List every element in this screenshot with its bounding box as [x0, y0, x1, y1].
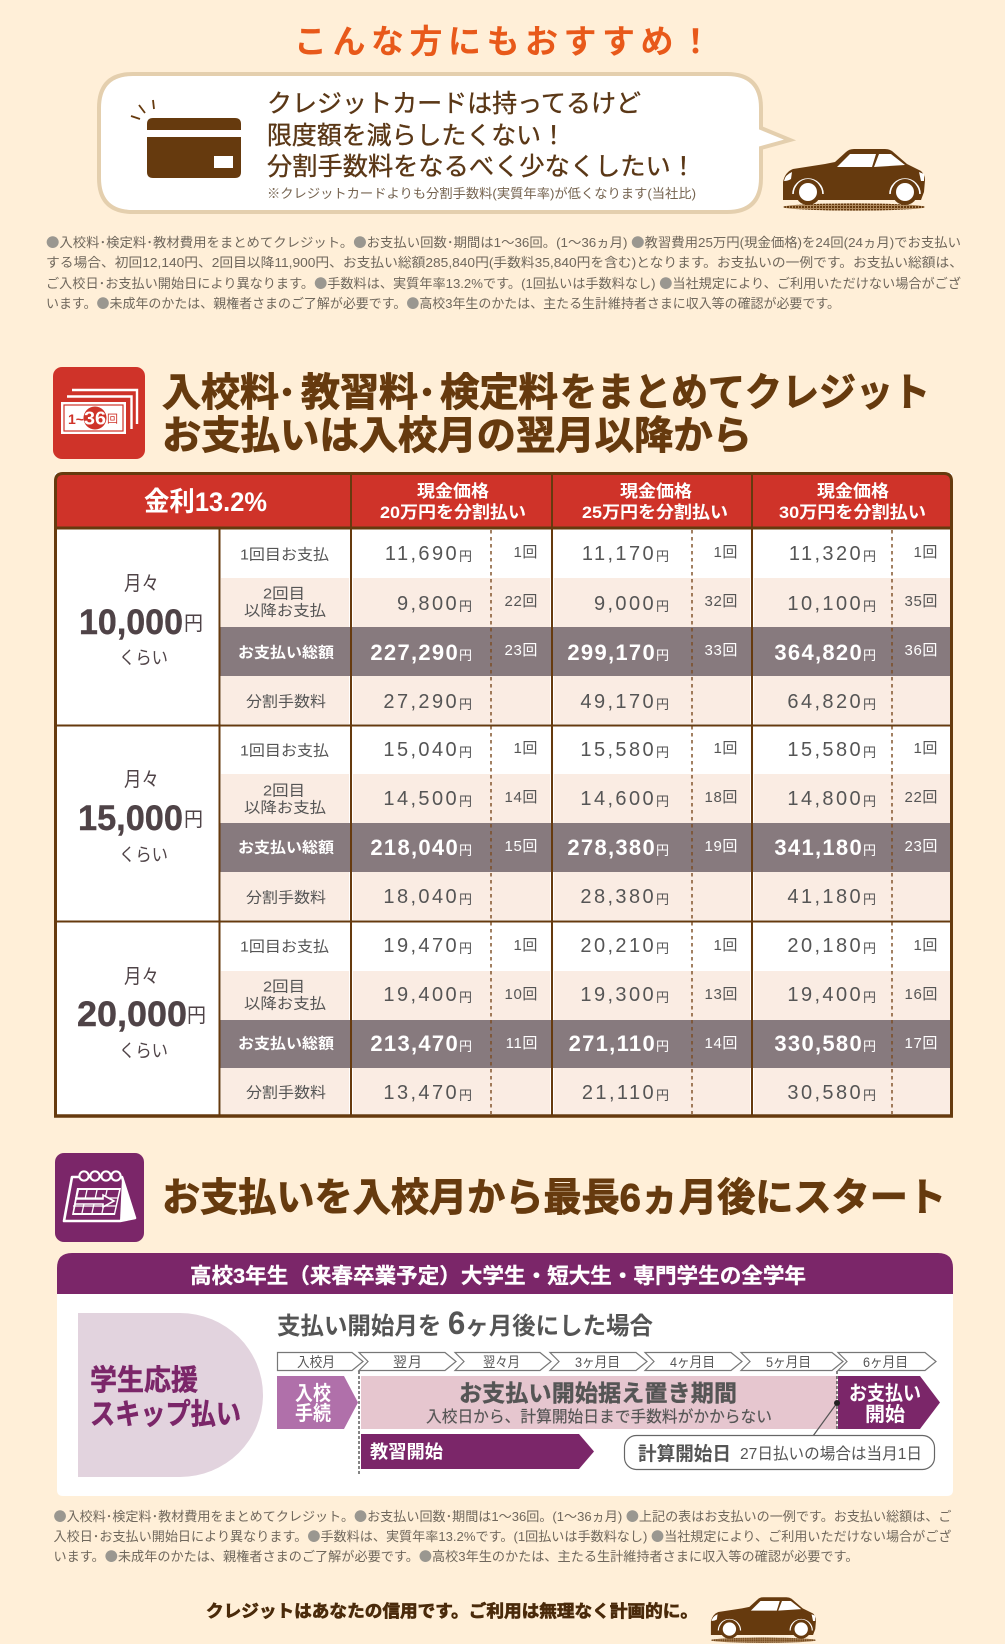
block: monthly 20,000 yen: 円 — [459, 941, 472, 956]
note text: top: する場合、初回12,140円、2回目以降11,900円、お支払い総額285,840円(手数料35,840円を含む)となります。お支払いの一例です。お支払い総額は、 — [46, 255, 963, 270]
timeline heading: 支払い開始月を 6ヶ月後にした場合 — [277, 1305, 653, 1341]
month chevrons: 5ヶ月目 — [766, 1354, 811, 1370]
bubble text: ※クレジットカードよりも分割手数料(実質年率)が低くなります(当社比) — [267, 186, 696, 201]
block: monthly 15,000 yen: 15,040 — [383, 739, 459, 761]
month chevrons: 入校月 — [297, 1354, 335, 1370]
block: monthly 10,000 yen: 33回 — [704, 642, 738, 659]
block: monthly 15,000 yen: 1回 — [913, 740, 938, 757]
block: monthly 20,000 yen: 円 — [863, 941, 876, 956]
block: monthly 20,000 yen: 月々 — [124, 966, 159, 988]
block: monthly 15,000 yen: 円 — [459, 892, 472, 907]
block: monthly 10,000 yen: 以降お支払 — [244, 602, 326, 620]
heading: section 1: 入校料 — [162, 372, 279, 415]
block: monthly 15,000 yen: 18,040 — [383, 886, 459, 908]
block: monthly 20,000 yen: 分割手数料 — [246, 1084, 326, 1102]
block: monthly 20,000 yen: 20,210 — [580, 935, 656, 957]
arrow: payment start — [838, 1376, 940, 1429]
icon: bills 1-36: 36 — [84, 408, 106, 428]
bubble text: 限度額を減らしたくない！ — [267, 122, 566, 150]
block: monthly 20,000 yen: 20,000 — [77, 995, 187, 1034]
callout: calculation start date: 27日払いの場合は当月1日 — [740, 1445, 922, 1463]
block: monthly 10,000 yen: 32回 — [704, 593, 738, 610]
plan name badge: 学生応援 — [90, 1364, 198, 1397]
block: monthly 20,000 yen: 円 — [656, 1039, 669, 1054]
block: monthly 20,000 yen: 円 — [459, 1039, 472, 1054]
speech bubble panel — [99, 74, 790, 212]
note text: top: います。●未成年のかたは、親権者さまのご了解が必要です。●高校3年生のかたは、主たる生計維持者さまに収入等の確認が必要です。 — [46, 293, 840, 312]
block: monthly 10,000 yen — [79, 543, 938, 713]
table header row — [56, 474, 952, 529]
heading: section 1: 教習料 — [301, 372, 418, 415]
block: monthly 15,000 yen — [78, 739, 938, 908]
block: monthly 15,000 yen: 円 — [459, 843, 472, 858]
block: monthly 10,000 yen: 49,170 — [580, 691, 656, 713]
block: monthly 15,000 yen: 2回目 — [263, 782, 305, 800]
block: monthly 15,000 yen: 円 — [863, 843, 876, 858]
table header row: 20万円を分割払い — [380, 503, 526, 522]
block: monthly 15,000 yen: 23回 — [904, 838, 938, 855]
block: monthly 15,000 yen: 15,580 — [787, 739, 863, 761]
block: monthly 10,000 yen: 円 — [656, 697, 669, 712]
block: monthly 15,000 yen: 円 — [863, 892, 876, 907]
bubble text: 分割手数料をなるべく少なくしたい！ — [267, 153, 696, 181]
block: monthly 20,000 yen: 13,470 — [383, 1082, 459, 1104]
footer message: クレジットはあなたの信用です。ご利用は無理なく計画的に。 — [206, 1601, 698, 1621]
table header row: 現金価格 — [417, 481, 489, 501]
month chevrons: 4ヶ月目 — [670, 1354, 715, 1370]
heading: section 1 — [162, 372, 930, 458]
block: monthly 15,000 yen: 22回 — [904, 789, 938, 806]
block: monthly 10,000 yen: 円 — [863, 599, 876, 614]
plan name badge — [78, 1313, 263, 1477]
block: monthly 20,000 yen: 330,580 — [774, 1031, 863, 1056]
block: monthly 10,000 yen: 1回 — [913, 544, 938, 561]
block: monthly 10,000 yen: 2回目 — [263, 586, 305, 602]
bubble shape — [99, 74, 790, 212]
note text: top — [46, 232, 963, 312]
block: monthly 20,000 yen: 円 — [187, 1005, 206, 1027]
callout: calculation start date — [624, 1400, 934, 1470]
block: monthly 15,000 yen: 14,600 — [580, 788, 656, 810]
block: monthly 20,000 yen: 1回 — [513, 937, 538, 954]
block: monthly 20,000 yen: 円 — [863, 1039, 876, 1054]
month chevrons: 翌々月 — [483, 1354, 520, 1370]
block: monthly 10,000 yen: くらい — [119, 648, 168, 668]
block: monthly 10,000 yen: 円 — [863, 697, 876, 712]
block: monthly 15,000 yen: 41,180 — [787, 886, 863, 908]
callout: calculation start date: 計算開始日 — [638, 1442, 731, 1465]
block: monthly 10,000 yen: 11,320 — [789, 543, 863, 565]
month chevrons — [278, 1352, 936, 1370]
block: monthly 20,000 yen — [77, 935, 938, 1104]
block: monthly 10,000 yen: 364,820 — [774, 640, 863, 665]
block: monthly 20,000 yen: 19,400 — [383, 984, 459, 1006]
block: monthly 10,000 yen: 分割手数料 — [246, 694, 326, 710]
block: monthly 20,000 yen: 2回目 — [263, 978, 305, 996]
block: monthly 10,000 yen: 23回 — [504, 642, 538, 659]
table header row: 現金価格 — [817, 481, 889, 501]
block: monthly 20,000 yen: 10回 — [504, 986, 538, 1003]
block: monthly 20,000 yen: 21,110 — [582, 1082, 656, 1104]
block: monthly 20,000 yen: 20,180 — [787, 935, 863, 957]
block: monthly 10,000 yen: 35回 — [904, 593, 938, 610]
arrow: payment start: 開始 — [865, 1403, 905, 1426]
grace period bar: お支払い開始据え置き期間 — [459, 1380, 737, 1406]
block: monthly 15,000 yen: 341,180 — [774, 835, 863, 860]
block: monthly 10,000 yen: 27,290 — [383, 691, 459, 713]
block: monthly 15,000 yen: 円 — [656, 843, 669, 858]
icon: credit card — [131, 100, 241, 178]
table header row: 現金価格 — [620, 481, 692, 501]
block: monthly 15,000 yen: 円 — [656, 745, 669, 760]
block: monthly 20,000 yen: 271,110 — [569, 1031, 656, 1056]
block: monthly 15,000 yen: 以降お支払 — [244, 800, 326, 816]
block: monthly 10,000 yen: 227,290 — [370, 640, 459, 665]
month chevrons: 3ヶ月目 — [575, 1354, 620, 1370]
block: monthly 20,000 yen: 11回 — [506, 1035, 538, 1052]
icon: calendar — [55, 1153, 144, 1242]
table header row: 25万円を分割払い — [582, 503, 728, 522]
block: monthly 20,000 yen: 円 — [863, 990, 876, 1005]
icon: bills 1-36: 回 — [107, 412, 118, 426]
block: monthly 15,000 yen: 円 — [863, 745, 876, 760]
block: monthly 15,000 yen: 円 — [656, 794, 669, 809]
icon: bills 1-36: 1~ — [68, 411, 84, 427]
block: monthly 10,000 yen: 1回目お支払 — [240, 546, 329, 564]
note text: top: ●入校料･検定料･教材費用をまとめてクレジット。 ●お支払い回数･期間は1〜36回。(1〜36ヵ月) ●教習費用25万円(現金価格)を24回(24ヵ月)でお支払い — [46, 232, 961, 251]
block: monthly 10,000 yen: 9,800 — [397, 593, 459, 615]
block: monthly 10,000 yen: 円 — [863, 648, 876, 663]
block: monthly 20,000 yen: 16回 — [904, 986, 938, 1003]
block: monthly 20,000 yen: くらい — [119, 1041, 168, 1061]
block: monthly 15,000 yen: 円 — [459, 794, 472, 809]
block: monthly 10,000 yen: 299,170 — [567, 640, 656, 665]
block: monthly 15,000 yen: 19回 — [704, 838, 738, 855]
block: monthly 15,000 yen: 15回 — [504, 838, 538, 855]
block: monthly 20,000 yen: 30,580 — [787, 1082, 863, 1104]
block: monthly 15,000 yen: 円 — [656, 892, 669, 907]
icon: bills 1-36 — [53, 367, 145, 459]
block: monthly 10,000 yen: 22回 — [504, 593, 538, 610]
block: monthly 10,000 yen: 円 — [184, 613, 203, 635]
block: monthly 15,000 yen: 円 — [459, 745, 472, 760]
title: こんな方にもおすすめ！ — [294, 23, 712, 60]
heading: section 1: 検定料 — [440, 372, 558, 415]
table header row: 金利13.2% — [144, 487, 267, 517]
block: monthly 10,000 yen: 円 — [656, 549, 669, 564]
block: monthly 20,000 yen: お支払い総額 — [238, 1034, 334, 1052]
arrow: classes start — [361, 1434, 594, 1469]
arrow: enrollment procedure — [277, 1376, 358, 1429]
block: monthly 10,000 yen: 円 — [656, 599, 669, 614]
note text: top: ご入校日･お支払い開始日により異なります。●手数料は、実質年率13.2%です。(1回払いは手数料なし) ●当社規定により、ご利用いただけない場合がござ — [46, 273, 961, 292]
payment table — [54, 473, 953, 1116]
block: monthly 20,000 yen: 1回 — [713, 937, 738, 954]
table header row: 30万円を分割払い — [779, 503, 926, 522]
block: monthly 20,000 yen: 19,300 — [580, 984, 656, 1006]
block: monthly 10,000 yen: 円 — [656, 648, 669, 663]
block: monthly 10,000 yen: 64,820 — [787, 691, 863, 713]
bubble text — [267, 90, 696, 201]
block: monthly 15,000 yen: 円 — [184, 809, 203, 831]
block: monthly 20,000 yen: 17回 — [904, 1035, 938, 1052]
block: monthly 10,000 yen: 円 — [459, 599, 472, 614]
block: monthly 15,000 yen: 15,000 — [78, 799, 183, 838]
month chevrons: 翌月 — [393, 1354, 422, 1370]
block: monthly 10,000 yen: 円 — [459, 648, 472, 663]
block: monthly 20,000 yen: 1回 — [913, 937, 938, 954]
block: monthly 20,000 yen: 213,470 — [370, 1031, 459, 1056]
block: monthly 15,000 yen: くらい — [119, 845, 168, 865]
block: monthly 15,000 yen: お支払い総額 — [238, 838, 334, 856]
panel: skip payment — [57, 1253, 953, 1496]
block: monthly 10,000 yen: 円 — [459, 549, 472, 564]
icon: car — [783, 149, 925, 211]
plan name badge: スキップ払い — [90, 1398, 241, 1431]
arrow: payment start: お支払い — [849, 1382, 921, 1405]
block: monthly 20,000 yen: 円 — [656, 941, 669, 956]
note text: bottom — [54, 1506, 952, 1565]
block: monthly 15,000 yen: 28,380 — [580, 886, 656, 908]
block: monthly 10,000 yen: お支払い総額 — [238, 644, 334, 662]
block: monthly 10,000 yen: 11,170 — [582, 543, 656, 565]
block: monthly 20,000 yen: 19,470 — [383, 935, 459, 957]
note text: bottom: います。●未成年のかたは、親権者さまのご了解が必要です。●高校3年生のかたは、主たる生計維持者さまに収入等の確認が必要です。 — [54, 1546, 858, 1565]
block: monthly 10,000 yen: 9,000 — [594, 593, 656, 615]
block: monthly 20,000 yen: 円 — [656, 1088, 669, 1103]
block: monthly 15,000 yen: 月々 — [124, 769, 159, 791]
note text: bottom: ●入校料･検定料･教材費用をまとめてクレジット。●お支払い回数･期間は1〜36回。(1〜36ヵ月) ●上記の表はお支払いの一例です。お支払い総額は、ご — [54, 1506, 952, 1525]
block: monthly 15,000 yen: 14,800 — [787, 788, 863, 810]
block: monthly 15,000 yen: 1回 — [713, 740, 738, 757]
block: monthly 15,000 yen: 1回 — [513, 740, 538, 757]
block: monthly 10,000 yen: 円 — [459, 697, 472, 712]
block: monthly 20,000 yen: 14回 — [704, 1035, 738, 1052]
block: monthly 20,000 yen: 円 — [656, 990, 669, 1005]
block: monthly 15,000 yen: 14回 — [504, 789, 538, 806]
block: monthly 10,000 yen: 10,100 — [787, 593, 863, 615]
block: monthly 15,000 yen: 18回 — [704, 789, 738, 806]
panel header — [57, 1253, 953, 1294]
block: monthly 10,000 yen: 36回 — [904, 642, 938, 659]
panel header: 高校3年生（来春卒業予定）大学生・短大生・専門学生の全学年 — [190, 1265, 806, 1288]
block: monthly 20,000 yen: 13回 — [704, 986, 738, 1003]
arrow: enrollment procedure: 手続 — [295, 1402, 331, 1425]
grace period bar: 入校日から、計算開始日まで手数料がかからない — [426, 1407, 772, 1426]
block: monthly 10,000 yen: 1回 — [513, 544, 538, 561]
block: monthly 20,000 yen: 1回目お支払 — [240, 938, 329, 956]
grace period bar — [361, 1376, 837, 1429]
icon: car small — [711, 1597, 816, 1643]
block: monthly 20,000 yen: 以降お支払 — [244, 996, 326, 1012]
heading: section 1: をまとめてクレジット — [560, 372, 930, 415]
block: monthly 15,000 yen: 1回目お支払 — [240, 742, 329, 760]
block: monthly 20,000 yen: 円 — [863, 1088, 876, 1103]
block: monthly 10,000 yen: 11,690 — [385, 543, 459, 565]
block: monthly 15,000 yen: 円 — [863, 794, 876, 809]
block: monthly 20,000 yen: 円 — [459, 990, 472, 1005]
block: monthly 20,000 yen: 19,400 — [787, 984, 863, 1006]
bubble text: クレジットカードは持ってるけど — [267, 90, 641, 118]
block: monthly 15,000 yen: 分割手数料 — [246, 890, 326, 906]
block: monthly 20,000 yen: 円 — [459, 1088, 472, 1103]
block: monthly 10,000 yen: 月々 — [124, 573, 159, 595]
month chevrons: 6ヶ月目 — [863, 1354, 908, 1370]
arrow: enrollment procedure: 入校 — [295, 1382, 331, 1405]
block: monthly 10,000 yen: 1回 — [713, 544, 738, 561]
block: monthly 15,000 yen: 218,040 — [370, 835, 459, 860]
block: monthly 15,000 yen: 278,380 — [567, 835, 656, 860]
heading: section 2: お支払いを入校月から最長6ヵ月後にスタート — [162, 1177, 946, 1220]
block: monthly 10,000 yen: 円 — [863, 549, 876, 564]
heading: section 1: お支払いは入校月の翌月以降から — [162, 415, 752, 458]
block: monthly 15,000 yen: 14,500 — [383, 788, 459, 810]
block: monthly 10,000 yen: 10,000 — [79, 603, 183, 642]
arrow: classes start: 教習開始 — [370, 1442, 443, 1462]
panel body — [57, 1290, 953, 1496]
block: monthly 15,000 yen: 15,580 — [580, 739, 656, 761]
note text: bottom: 入校日･お支払い開始日により異なります。●手数料は、実質年率13.2%です。(1回払いは手数料なし) ●当社規定により、ご利用いただけない場合がござ — [54, 1526, 952, 1545]
